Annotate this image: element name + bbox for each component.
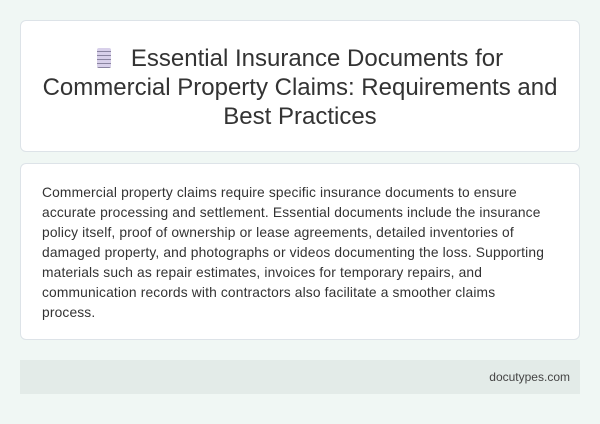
text block xyxy=(42,185,544,320)
title: Best Practices xyxy=(223,103,377,130)
title xyxy=(43,45,557,130)
text block: communication records with contractors also facilitate a smoother claims xyxy=(42,285,495,300)
footer xyxy=(20,360,580,394)
panel: title xyxy=(20,20,580,152)
text block: materials such as repair estimates, invoices for temporary repairs, and xyxy=(42,265,482,280)
title: Commercial Property Claims: Requirements and xyxy=(43,74,557,101)
text block: damaged property, and photographs or videos documenting the loss. Supporting xyxy=(42,245,544,260)
icon: document xyxy=(97,48,111,68)
footer text: docutypes.com xyxy=(489,370,570,384)
panel: description xyxy=(20,163,580,340)
text block: policy itself, proof of ownership or lease agreements, detailed inventories of xyxy=(42,225,514,240)
text block: Commercial property claims require specific insurance documents to ensure xyxy=(42,185,517,200)
title: Essential Insurance Documents for xyxy=(131,45,503,72)
text block: accurate processing and settlement. Essential documents include the insurance xyxy=(42,205,541,220)
text block: process. xyxy=(42,305,95,320)
